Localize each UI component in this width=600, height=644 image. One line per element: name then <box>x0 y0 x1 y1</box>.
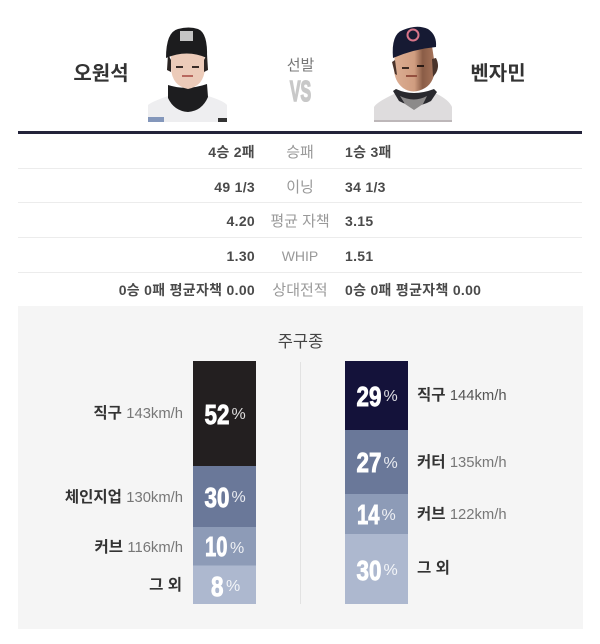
segment: curve 14%: 14 <box>357 500 380 531</box>
segment: cutter 27% <box>345 430 408 494</box>
panel: pitch mix <box>18 306 583 629</box>
player photo: left <box>148 28 227 122</box>
segment: cutter 27%: % <box>384 455 398 472</box>
row: era: 평균 자책 <box>270 213 330 230</box>
segment: curve 10% <box>193 527 256 566</box>
segment: curve 14% <box>345 494 408 534</box>
row: head to head: 0승 0패 평균자책 0.00 <box>119 282 255 298</box>
panel heading: 주구종 <box>278 333 323 351</box>
row: whip: WHIP <box>282 248 318 264</box>
labels: right pitcher: 커터 135km/h <box>417 453 507 471</box>
labels: right pitcher <box>417 386 507 577</box>
row: innings: 이닝 <box>286 179 314 196</box>
row: head to head <box>119 282 481 299</box>
labels: left pitcher: 커브 116km/h <box>95 538 183 556</box>
labels: left pitcher: 그 외 <box>149 576 182 594</box>
segment: changeup 30%: 30 <box>204 483 229 514</box>
row: innings <box>214 179 386 196</box>
segment: fastball 52% <box>193 361 256 466</box>
segment: other 8%: % <box>226 578 240 595</box>
row: head to head: 0승 0패 평균자책 0.00 <box>345 282 481 298</box>
labels: left pitcher <box>65 404 183 594</box>
row: innings: 34 1/3 <box>345 179 386 195</box>
vs mark: VS <box>290 75 311 107</box>
labels: right pitcher: 그 외 <box>417 559 450 577</box>
segment: curve 10%: % <box>230 540 244 557</box>
row: head to head: 상대전적 <box>272 282 328 299</box>
labels: left pitcher: 체인지업 130km/h <box>65 488 183 506</box>
segment: fastball 29%: 29 <box>356 382 381 413</box>
labels: right pitcher: 커브 122km/h <box>417 505 507 523</box>
segment: cutter 27%: 27 <box>356 448 381 479</box>
bar chart: right pitcher <box>345 361 408 604</box>
row: whip: 1.30 <box>227 248 255 264</box>
segment: other 30% <box>345 534 408 604</box>
segment: fastball 52%: % <box>232 406 246 423</box>
row: era <box>227 213 373 230</box>
segment: fastball 29% <box>345 361 408 430</box>
row: whip <box>227 248 373 264</box>
segment: other 30%: % <box>384 562 398 579</box>
segment: fastball 29%: % <box>384 388 398 405</box>
player name: left: 오원석 <box>73 62 129 85</box>
row: win loss: 1승 3패 <box>345 144 392 160</box>
row: era: 3.15 <box>345 213 373 229</box>
segment: other 30%: 30 <box>356 556 381 587</box>
segment: curve 10%: 10 <box>205 532 227 563</box>
segment: other 8%: 8 <box>211 572 223 603</box>
segment: curve 14%: % <box>382 507 396 524</box>
stats table <box>18 144 582 299</box>
player photo: right <box>374 27 452 122</box>
segment: changeup 30%: % <box>232 489 246 506</box>
row: win loss <box>208 144 392 161</box>
segment: changeup 30% <box>193 466 256 527</box>
row: win loss: 승패 <box>286 144 314 161</box>
bar chart: left pitcher <box>193 361 256 604</box>
row: whip: 1.51 <box>345 248 373 264</box>
segment: fastball 52%: 52 <box>204 400 229 431</box>
row: innings: 49 1/3 <box>214 179 255 195</box>
player name: right: 벤자민 <box>470 62 526 85</box>
labels: left pitcher: 직구 143km/h <box>93 404 183 422</box>
segment: other 8% <box>193 566 256 604</box>
labels: right pitcher: 직구 144km/h <box>417 386 507 404</box>
starter label: 선발 <box>287 57 314 74</box>
row: era: 4.20 <box>227 213 255 229</box>
row: win loss: 4승 2패 <box>208 144 255 160</box>
header rule <box>18 131 582 134</box>
